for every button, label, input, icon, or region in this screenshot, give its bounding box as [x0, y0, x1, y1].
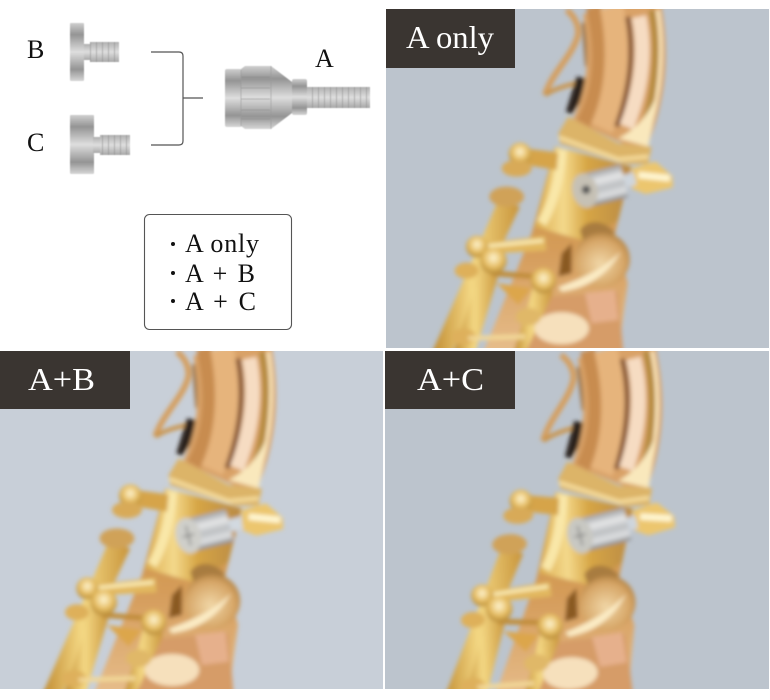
label C: C [27, 128, 44, 157]
label B: B [27, 35, 44, 64]
saxophone photo A+B [42, 348, 283, 695]
options box: A + C [185, 287, 256, 316]
label A: A [315, 44, 334, 73]
options box [144, 214, 292, 330]
label: A only: A only [406, 19, 494, 55]
label: A+B: A+B [28, 361, 95, 397]
options box: A + B [185, 259, 255, 288]
part A screw [225, 66, 370, 129]
part B thumb screw [70, 23, 119, 81]
bracket connector [151, 52, 203, 145]
panel: parts diagram [27, 23, 370, 330]
saxophone photo A+C [444, 351, 678, 689]
part C thumb screw [70, 115, 130, 174]
label: A+C: A+C [417, 361, 484, 397]
label: A+B [0, 351, 130, 409]
options box: A only [185, 229, 259, 258]
saxophone photo A only [432, 7, 673, 353]
label: A only [386, 9, 515, 68]
panel: A only [386, 7, 769, 353]
panel: A+B [0, 348, 383, 695]
label: A+C [385, 351, 515, 409]
panel: A+C [385, 347, 769, 700]
